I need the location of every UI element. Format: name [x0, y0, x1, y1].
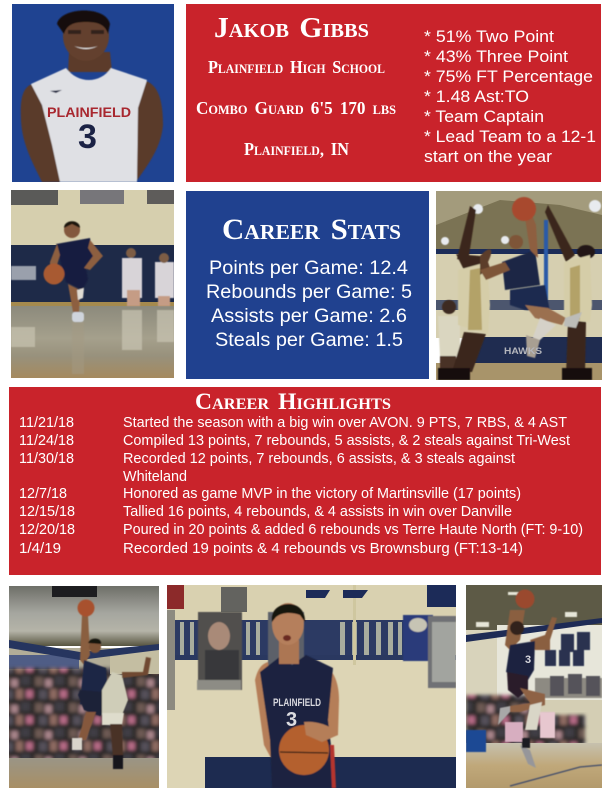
table: dated highlights: Recorded 19 points & 4 rebounds vs Brownsburg (FT:13-14) [123, 540, 523, 557]
table: dated highlights: Poured in 20 points & added 6 rebounds vs Terre Haute North (FT: 9-10) [123, 521, 583, 538]
table: dated highlights: 11/21/18 [19, 414, 74, 431]
panel: career stats [186, 191, 429, 379]
table: dated highlights: 12/15/18 [19, 503, 75, 520]
player name: Jakob Gibbs [214, 12, 369, 44]
table: dated highlights: Whiteland [123, 468, 187, 485]
list: season percentages and achievements: * 1.48 Ast:TO [424, 87, 529, 106]
wall lettering: HAWKS [504, 346, 542, 356]
jersey number: 3 [78, 118, 97, 156]
jersey lettering: PLAINFIELD [47, 104, 131, 120]
table: dated highlights: Started the season with a big win over AVON. 9 PTS, 7 RBS, & 4 AST [123, 414, 567, 431]
stat: points: Points per Game: 12.4 [209, 258, 408, 279]
list: season percentages and achievements: start on the year [424, 147, 552, 166]
photo: player preparing a free throw [167, 585, 456, 788]
stat: assists: Assists per Game: 2.6 [211, 306, 407, 327]
stat: steals: Steals per Game: 1.5 [215, 330, 403, 351]
position and size: Combo Guard 6'5 170 lbs [196, 98, 396, 118]
panel: player info [186, 4, 601, 182]
heading: Career Highlights [195, 389, 391, 414]
panel: career highlights [9, 387, 601, 575]
list: season percentages and achievements: * Team Captain [424, 107, 544, 126]
photo: player shooting between two defenders [436, 191, 602, 380]
table: dated highlights [19, 414, 583, 557]
photo: player in mid-air layup [466, 585, 602, 788]
jersey number: 3 [286, 709, 297, 731]
table: dated highlights: Tallied 16 points, 4 rebounds, & 4 assists in win over Danville [123, 503, 512, 520]
photo: player dribbling up the court [11, 190, 174, 378]
table: dated highlights: Compiled 13 points, 7 rebounds, 5 assists, & 2 steals against Tri-West [123, 432, 571, 449]
list: season percentages and achievements: * 75% FT Percentage [424, 67, 593, 86]
table: dated highlights: 12/20/18 [19, 521, 75, 538]
school: Plainfield High School [208, 57, 385, 77]
hometown: Plainfield, IN [244, 139, 349, 159]
list: season percentages and achievements: * 51% Two Point [424, 27, 554, 46]
jersey lettering: PLAINFIELD [273, 697, 321, 709]
table: dated highlights: 11/30/18 [19, 450, 74, 467]
photo: layup in front of crowd [9, 586, 159, 788]
table: dated highlights: Honored as game MVP in the victory of Martinsville (17 points) [123, 485, 521, 502]
photo: player portrait on blue background [12, 4, 174, 182]
heading: Career Stats [222, 213, 401, 246]
stat: rebounds: Rebounds per Game: 5 [206, 282, 412, 303]
table: dated highlights: 1/4/19 [19, 540, 61, 557]
table: dated highlights: Recorded 12 points, 7 rebounds, 6 assists, & 3 steals against [123, 450, 516, 467]
list: season percentages and achievements: * 43% Three Point [424, 47, 568, 66]
table: dated highlights: 11/24/18 [19, 432, 74, 449]
list: season percentages and achievements: * Lead Team to a 12-1 [424, 127, 596, 146]
table: dated highlights: 12/7/18 [19, 485, 67, 502]
list: season percentages and achievements [424, 27, 596, 166]
jersey number: 3 [525, 654, 531, 666]
